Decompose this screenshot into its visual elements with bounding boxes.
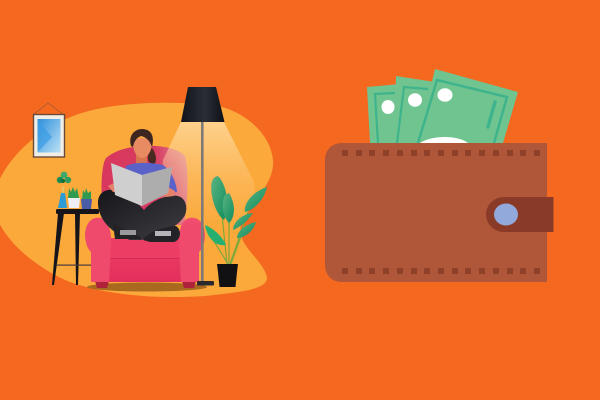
floor lamp	[181, 87, 224, 286]
left shoe	[113, 224, 142, 239]
middle banknote	[394, 76, 435, 143]
right shoe	[143, 226, 180, 242]
armchair	[85, 146, 205, 288]
chair back	[102, 146, 188, 225]
neck and face	[136, 155, 147, 167]
banknotes	[367, 69, 518, 143]
top stitching	[342, 150, 540, 156]
wall picture	[33, 103, 64, 157]
chair seat	[105, 238, 185, 282]
wallet	[325, 143, 554, 282]
large potted plant	[205, 176, 267, 287]
open magazine	[111, 163, 172, 206]
chair feet	[95, 281, 196, 288]
woman reading	[98, 129, 186, 242]
crossed legs	[98, 190, 186, 240]
yellow blob backdrop	[0, 103, 273, 297]
right arm	[179, 218, 205, 282]
side table with plants	[52, 172, 99, 285]
lamp light cone	[160, 122, 255, 226]
front banknote	[417, 69, 518, 143]
back banknote	[367, 84, 402, 143]
bottom stitching	[342, 268, 540, 274]
hair ponytail	[148, 147, 156, 164]
blue shirt	[118, 163, 177, 196]
left arm	[85, 218, 111, 282]
wallet clasp	[486, 197, 554, 232]
hands	[108, 182, 175, 197]
plant pot	[217, 264, 238, 287]
hair	[130, 129, 153, 147]
clasp button	[494, 204, 518, 226]
potted plants	[57, 172, 92, 209]
floor shadow	[87, 282, 207, 292]
